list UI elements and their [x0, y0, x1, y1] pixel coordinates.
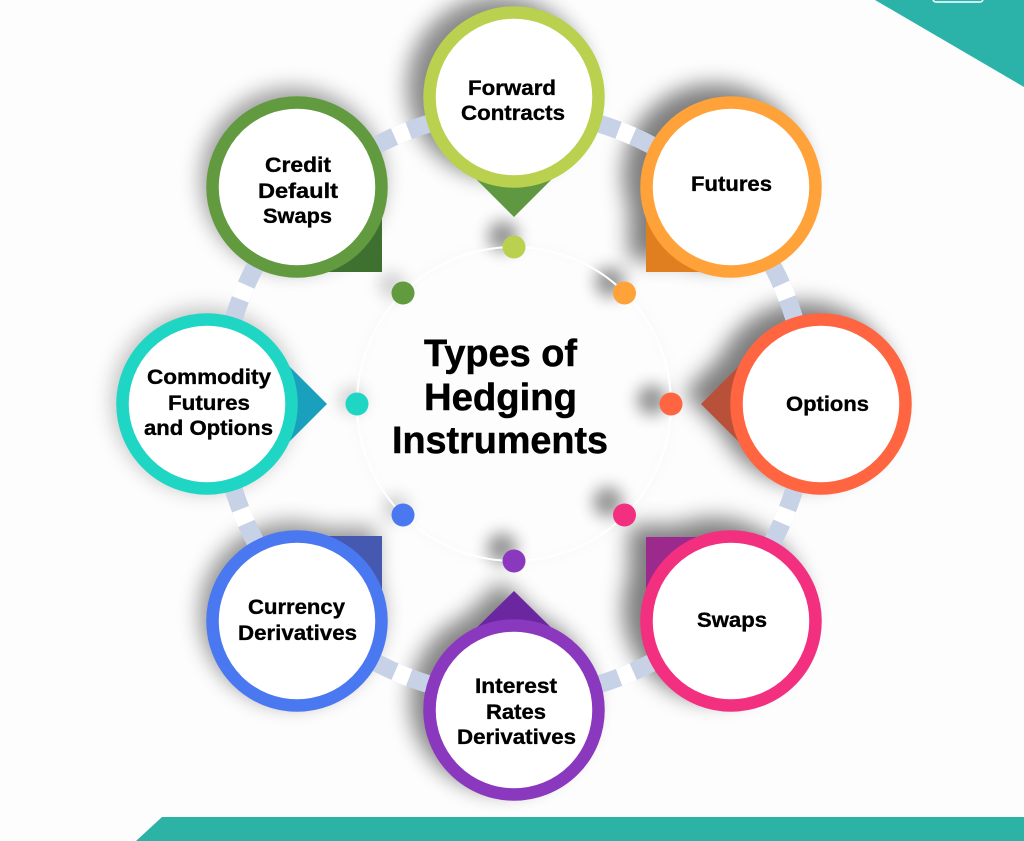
bottom teal band: [136, 817, 1024, 841]
ring: Interest Rates Derivatives: [430, 626, 598, 794]
label: Credit Default Swaps: Swaps: [263, 205, 332, 228]
label: Forward Contracts: [461, 77, 565, 125]
node: Currency Derivatives: [212, 536, 382, 706]
label: Currency Derivatives: [238, 596, 357, 645]
label: Currency Derivatives: Derivatives: [238, 622, 357, 645]
title: [392, 333, 608, 462]
label: Forward Contracts: Forward: [468, 77, 556, 100]
pointer: Options: [701, 344, 821, 464]
ring: Currency Derivatives: [212, 536, 382, 706]
label: Swaps: Swaps: [697, 609, 767, 632]
label: Interest Rates Derivatives: Rates: [486, 701, 546, 724]
label: Currency Derivatives: Currency: [248, 596, 345, 619]
ring: Futures: [646, 102, 816, 272]
ring: Credit Default Swaps: [212, 102, 382, 272]
node: Forward Contracts: [430, 12, 598, 217]
pointer: Futures: [646, 187, 731, 272]
ring: Options: [736, 320, 906, 488]
node: Futures: [646, 102, 816, 272]
connector dots: [346, 236, 682, 572]
label: Interest Rates Derivatives: Interest: [475, 675, 557, 698]
pointer: Forward Contracts: [454, 97, 574, 217]
node: Options: [701, 320, 906, 488]
label: Interest Rates Derivatives: Derivatives: [457, 726, 576, 749]
label: Commodity Futures and Options: Commodity: [147, 366, 271, 389]
title: Types of: [424, 333, 577, 375]
pointer: Commodity Futures and Options: [207, 344, 327, 464]
soft drop shadows: [113, 0, 895, 791]
node: Interest Rates Derivatives: [430, 591, 598, 794]
pointer: Swaps: [646, 537, 731, 621]
label: Forward Contracts: Contracts: [461, 102, 565, 125]
ring: Commodity Futures and Options: [122, 320, 292, 488]
label: Credit Default Swaps: [258, 154, 338, 228]
node: Credit Default Swaps: [212, 102, 382, 272]
label: Commodity Futures and Options: and Options: [144, 417, 273, 440]
title: Hedging: [424, 377, 577, 419]
label: Credit Default Swaps: Credit: [265, 154, 331, 177]
ring: Forward Contracts: [430, 12, 598, 182]
label: Futures: Futures: [691, 173, 772, 196]
pointer: Currency Derivatives: [297, 536, 382, 621]
label: Interest Rates Derivatives: [457, 675, 576, 749]
inner ring: [357, 247, 671, 561]
pointer: Credit Default Swaps: [297, 187, 382, 272]
pointer: Interest Rates Derivatives: [454, 591, 574, 710]
label: Commodity Futures and Options: Futures: [168, 392, 250, 415]
title: Instruments: [392, 420, 608, 462]
ring: Swaps: [646, 536, 816, 706]
node: Commodity Futures and Options: [122, 320, 327, 488]
dashed outer ring: [221, 111, 807, 697]
label: Options: Options: [786, 393, 869, 416]
node: Swaps: [646, 536, 816, 706]
top-right teal corner: [875, 0, 1024, 87]
label: Commodity Futures and Options: [144, 366, 273, 440]
label: Credit Default Swaps: Default: [258, 180, 338, 203]
